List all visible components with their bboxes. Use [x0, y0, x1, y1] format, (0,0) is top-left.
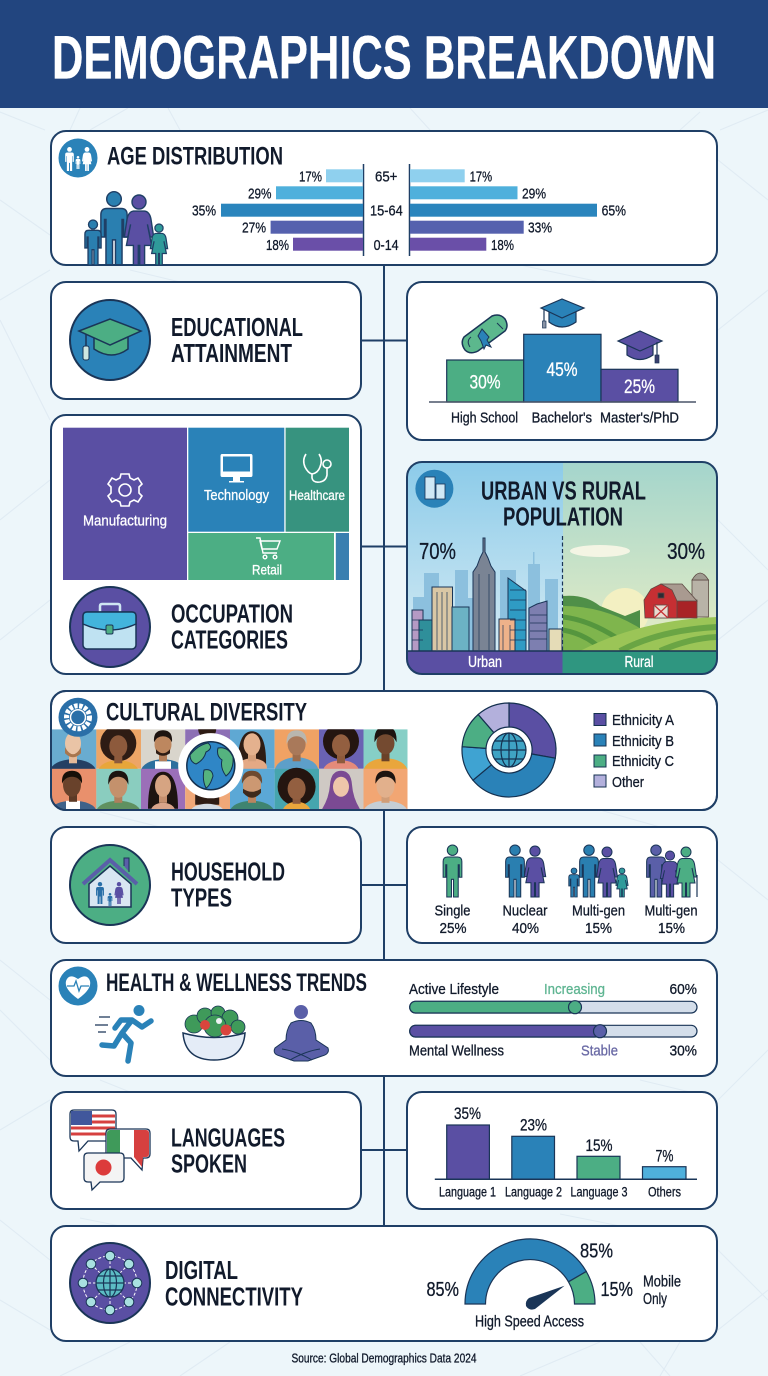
icon: monitor — [220, 454, 252, 482]
panel: health and wellness — [51, 960, 717, 1076]
portrait mosaic — [52, 729, 408, 809]
heading: urban vs rural — [481, 475, 646, 532]
donut legend: Ethnicity C — [612, 753, 674, 770]
gauge chart: 85% — [426, 1279, 459, 1301]
icon: gear — [108, 474, 142, 506]
podium bar chart: Bachelor's — [532, 410, 592, 427]
podium bar chart: High School — [451, 410, 518, 427]
population pyramid chart: 27% — [242, 220, 266, 236]
heading: household types: HOUSEHOLD — [171, 857, 285, 887]
panel: languages bar chart: 15% — [586, 1136, 612, 1155]
panel: education chart — [407, 282, 717, 440]
icon: meditation figure — [274, 1005, 328, 1061]
urban vs rural divider — [562, 536, 564, 651]
panel: household figures — [407, 827, 717, 943]
panel: urban vs rural: Urban — [468, 654, 502, 671]
title banner — [0, 0, 768, 108]
figure: multi-generation elders — [644, 845, 698, 937]
heading: languages spoken — [171, 1123, 285, 1179]
panel: languages bar chart: Language 2 — [505, 1185, 562, 1200]
population pyramid chart: 15-64 — [370, 202, 403, 220]
panel: urban vs rural — [407, 462, 717, 674]
trend meters: Increasing — [544, 981, 605, 998]
gauge chart: Mobile — [643, 1274, 681, 1291]
population pyramid chart: 0-14 — [374, 237, 399, 254]
treemap chart: Healthcare — [289, 488, 345, 503]
podium bar chart: 30% — [470, 373, 501, 394]
illustration: city and farm — [407, 462, 717, 674]
icon: earth globe — [178, 733, 243, 798]
donut legend: Other — [612, 774, 644, 791]
icon: culture badge — [58, 698, 98, 737]
population pyramid chart: 35% — [192, 202, 216, 220]
icon: diploma — [462, 315, 507, 353]
panel: educational attainment heading — [51, 282, 361, 399]
heading: occupation categories: CATEGORIES — [171, 625, 288, 655]
trend meters: 60% — [670, 981, 697, 998]
donut legend: Ethnicity B — [612, 733, 674, 750]
panel: languages spoken heading — [51, 1092, 361, 1209]
panel: urban vs rural: 30% — [667, 538, 705, 564]
heading: urban vs rural: POPULATION — [503, 502, 623, 532]
farm fields — [563, 545, 717, 651]
population pyramid chart: 33% — [528, 220, 552, 236]
population pyramid chart: 65% — [602, 202, 626, 220]
heading: digital connectivity: CONNECTIVITY — [165, 1282, 303, 1312]
panel: languages bar chart: 7% — [656, 1147, 674, 1166]
figure: multi-generation family: 15% — [585, 920, 612, 937]
population pyramid chart: 17% — [470, 168, 492, 186]
population pyramid chart: 29% — [248, 186, 272, 202]
bubble: italy flag — [106, 1129, 150, 1170]
heading: urban vs rural: URBAN VS RURAL — [481, 475, 646, 505]
heading: occupation categories — [171, 599, 293, 655]
podium bar chart: 45% — [546, 360, 578, 381]
heading: household types — [171, 857, 285, 913]
panel: languages bar chart: 23% — [520, 1116, 547, 1135]
heading: health and wellness trends: HEALTH & WELLNESS TRENDS — [106, 969, 367, 997]
panel: languages bar chart: Language 1 — [439, 1185, 496, 1200]
urban rural label strip — [407, 651, 717, 674]
trend meters: Stable — [581, 1043, 618, 1060]
panel: languages bar chart — [407, 1092, 717, 1209]
population pyramid chart: 17% — [299, 168, 322, 186]
figure: multi-generation family: Multi-gen — [572, 903, 625, 920]
panel: household types heading — [51, 827, 361, 943]
bubble: japan flag — [84, 1153, 124, 1190]
barn and silo — [644, 573, 708, 618]
icon: heartbeat badge — [58, 966, 98, 1006]
population pyramid chart: 29% — [522, 186, 546, 202]
gauge chart: 15% — [600, 1279, 633, 1301]
treemap chart: Retail — [252, 562, 282, 578]
icon: family badge — [58, 138, 98, 178]
icon: city buildings badge — [415, 470, 453, 508]
heading: age distribution: AGE DISTRIBUTION — [107, 142, 283, 170]
gauge chart: Only — [643, 1291, 667, 1308]
icon: house badge — [70, 845, 150, 925]
panel: occupation categories — [51, 415, 361, 674]
podium bar chart: 25% — [624, 377, 655, 398]
donut legend — [594, 712, 674, 791]
panel: languages bar chart: Others — [648, 1185, 681, 1200]
icon: flag speech bubbles — [70, 1110, 150, 1190]
panel: urban vs rural: 70% — [419, 538, 456, 564]
treemap chart — [63, 428, 349, 580]
heading: digital connectivity: DIGITAL — [165, 1255, 238, 1285]
trend meters: 30% — [670, 1043, 697, 1060]
icon: globe centre — [492, 733, 526, 767]
heading: languages spoken: SPOKEN — [171, 1149, 247, 1179]
panel: digital connectivity — [51, 1226, 717, 1341]
bubble: united states flag — [70, 1110, 116, 1151]
gauge chart: 85% — [580, 1241, 613, 1263]
heading: cultural diversity: CULTURAL DIVERSITY — [106, 699, 307, 727]
treemap chart: Technology — [204, 487, 269, 504]
source note: Source: Global Demographics Data 2024 — [292, 1352, 477, 1366]
podium bar chart: Master's/PhD — [600, 410, 679, 427]
trend meters: Mental Wellness — [409, 1043, 504, 1060]
panel: cultural diversity — [50, 691, 717, 823]
figure: single: 25% — [440, 920, 466, 937]
trend meters: Active Lifestyle — [409, 981, 499, 998]
icon: bachelor cap — [541, 299, 584, 328]
icon: graduation cap badge — [70, 300, 150, 380]
panel: languages bar chart: Language 3 — [570, 1185, 628, 1200]
treemap chart: Manufacturing — [83, 513, 167, 530]
heading: educational attainment — [171, 312, 303, 368]
icon: shopping cart — [256, 538, 280, 559]
panel: urban vs rural: Rural — [624, 654, 654, 671]
icon: stethoscope — [304, 454, 331, 482]
gauge chart — [426, 1239, 681, 1331]
heading: occupation categories: OCCUPATION — [171, 599, 293, 629]
icon: family figures — [85, 192, 168, 265]
figure: multi-generation elders: 15% — [658, 920, 685, 937]
gauge needle — [526, 1286, 565, 1310]
gauge chart: High Speed Access — [475, 1314, 584, 1331]
figure: nuclear: Nuclear — [502, 903, 548, 920]
donut chart — [462, 703, 556, 797]
icon: runner — [95, 1005, 151, 1061]
population pyramid chart: 18% — [266, 237, 289, 254]
figure: multi-generation elders: Multi-gen — [644, 903, 698, 920]
icon: master cap — [618, 331, 662, 363]
population pyramid chart: 65+ — [375, 168, 398, 186]
figure: single — [434, 845, 470, 937]
building windows — [412, 574, 547, 650]
figure: single: Single — [434, 903, 470, 920]
heading: educational attainment: EDUCATIONAL — [171, 312, 303, 342]
population pyramid chart: 18% — [491, 237, 514, 254]
trend meters — [409, 981, 697, 1060]
icon: salad bowl — [183, 1006, 245, 1060]
population pyramid chart — [192, 164, 626, 256]
central connector lines — [361, 265, 407, 1226]
podium bar chart — [429, 334, 696, 427]
distant skyline — [413, 552, 558, 651]
figure: nuclear: 40% — [512, 920, 539, 937]
heading: languages spoken: LANGUAGES — [171, 1123, 285, 1153]
heading: educational attainment: ATTAINMENT — [171, 338, 292, 368]
buildings — [412, 538, 562, 651]
icon: network globe badge — [70, 1243, 150, 1323]
figure: multi-generation family — [569, 845, 628, 937]
panel: age distribution — [51, 131, 717, 265]
icon: briefcase badge — [70, 587, 150, 667]
heading: digital connectivity — [165, 1255, 303, 1312]
donut legend: Ethnicity A — [612, 712, 674, 729]
panel: languages bar chart: 35% — [454, 1104, 481, 1123]
heading: household types: TYPES — [171, 883, 232, 913]
figure: nuclear — [502, 845, 548, 937]
